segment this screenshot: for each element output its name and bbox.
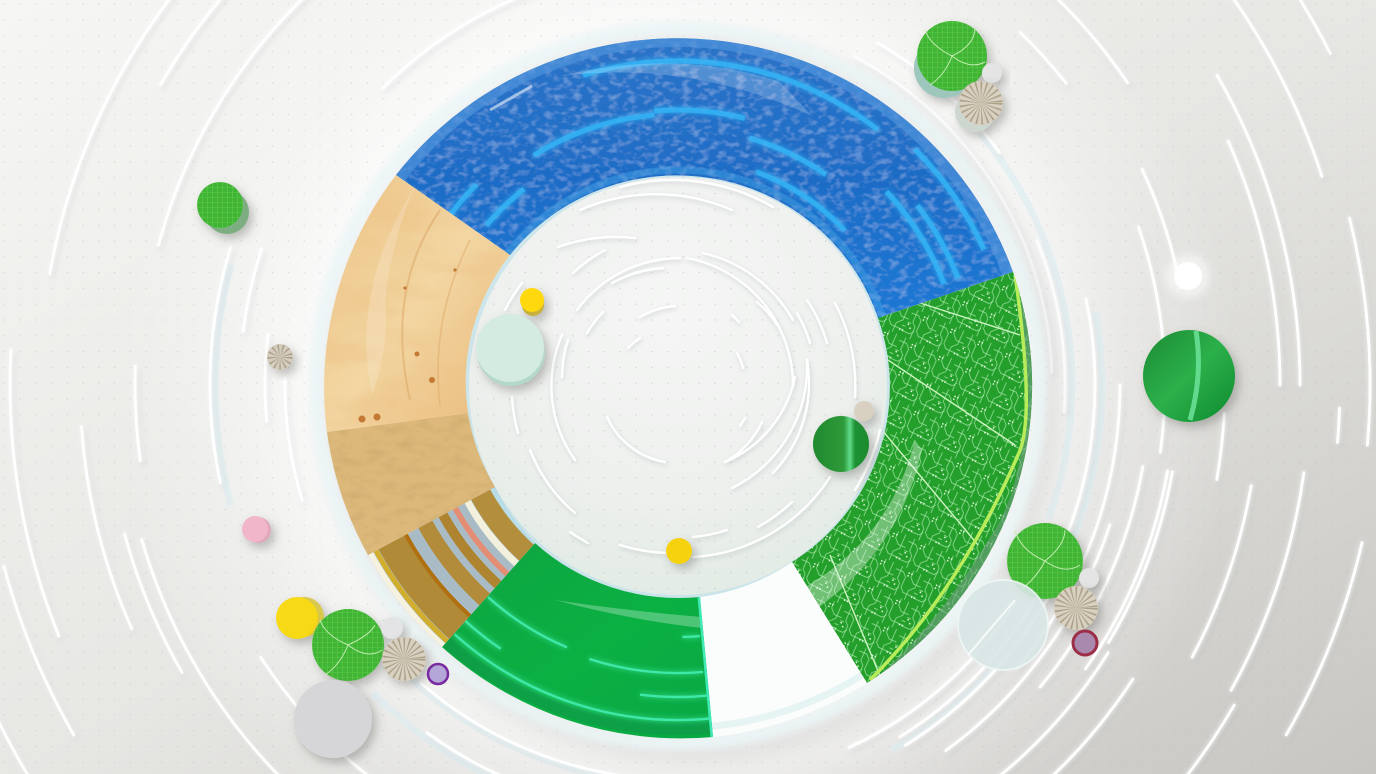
yellow peg centre top (520, 288, 544, 316)
small wood knob centre right (854, 401, 874, 421)
gloss highlight (560, 63, 812, 116)
purple ring right (1073, 631, 1097, 655)
wood knob lower left (382, 637, 426, 681)
segment: gold stripes (368, 487, 535, 647)
leaf gloss (800, 440, 922, 610)
centre disc streaks (505, 180, 880, 557)
big green glass sphere (1143, 330, 1235, 422)
small white peg lower left (381, 617, 403, 639)
mint cylinder (476, 314, 545, 386)
yellow peg bottom (666, 538, 692, 564)
small white peg right (1079, 568, 1099, 588)
small green disc upper left (197, 182, 249, 234)
purple ring lower left (428, 664, 448, 684)
glass disc right (958, 580, 1048, 670)
leaf veins (830, 303, 1020, 700)
leaf disc top right (914, 21, 987, 98)
pink peg (242, 516, 271, 543)
segment: circuit leaf (792, 272, 1032, 700)
wood knob right (1054, 586, 1098, 630)
segment: white light (700, 562, 867, 737)
segment: blue water (396, 38, 1013, 318)
dark green disc (813, 416, 869, 472)
centre disc (464, 172, 892, 600)
grey cylinder lower left (294, 680, 372, 758)
segment: OSB board (327, 413, 495, 555)
small wood knob left (267, 344, 293, 370)
yellow cylinder lower left (276, 597, 324, 639)
white glow dot (1166, 254, 1210, 298)
wood knots (358, 268, 457, 422)
wood knob top right (955, 81, 1003, 132)
leaf disc lower left (312, 609, 384, 681)
ring cast shadow (330, 40, 1050, 752)
small white peg top right (982, 63, 1002, 83)
wood grain swirl (366, 188, 414, 395)
glass halo around ring (316, 28, 1040, 744)
segment: light wood (324, 175, 510, 432)
green light streaks (452, 594, 712, 725)
water light streaks (448, 56, 988, 286)
glass reflection (555, 600, 702, 628)
segment: green glass (442, 543, 713, 738)
leaf disc right (1007, 523, 1083, 599)
